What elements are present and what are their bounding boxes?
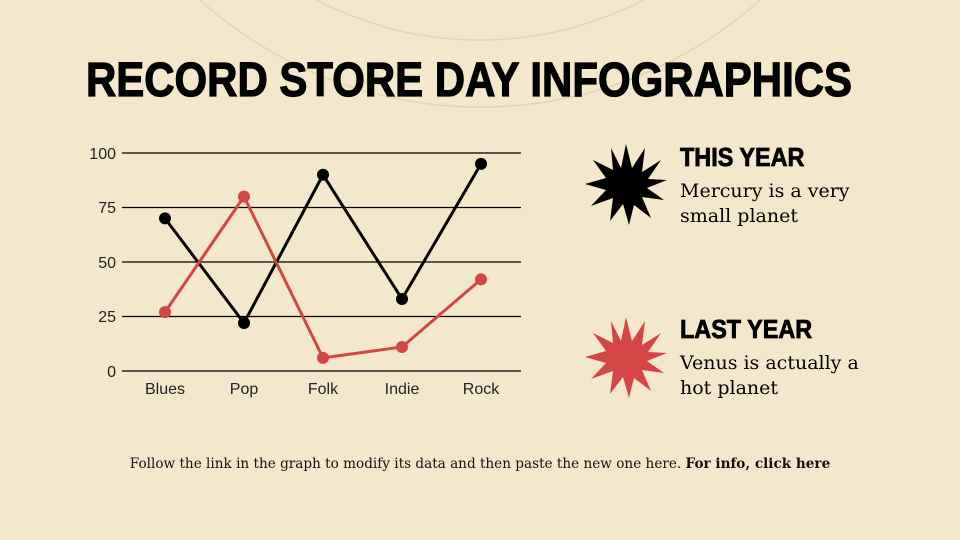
line chart: Rock [463, 381, 500, 398]
legend: this year: Mercury is a very [680, 180, 850, 202]
legend: last year: LAST YEAR [680, 314, 812, 344]
line chart [89, 146, 521, 398]
legend: this year [680, 142, 850, 227]
line chart: Pop [230, 381, 258, 398]
line chart: 75 [98, 200, 116, 217]
line chart: 25 [98, 309, 116, 326]
title: RECORD STORE DAY INFOGRAPHICS [86, 54, 852, 107]
legend: this year: small planet [680, 205, 798, 227]
legend: last year: Venus is actually a [680, 352, 859, 374]
footer note: Follow the link in the graph to modify its data and then paste the new one here. For info, click here [130, 456, 830, 472]
icon: red starburst [585, 317, 667, 398]
line chart: 50 [98, 255, 116, 272]
line chart: Indie [385, 381, 419, 398]
legend: last year: hot planet [680, 377, 778, 399]
legend: this year: THIS YEAR [680, 142, 804, 172]
line chart: 100 [89, 146, 116, 163]
line chart: Folk [308, 381, 339, 398]
legend: last year [680, 314, 859, 399]
icon: black starburst [585, 144, 667, 225]
line chart: 0 [107, 364, 116, 381]
line chart: Blues [145, 381, 185, 398]
